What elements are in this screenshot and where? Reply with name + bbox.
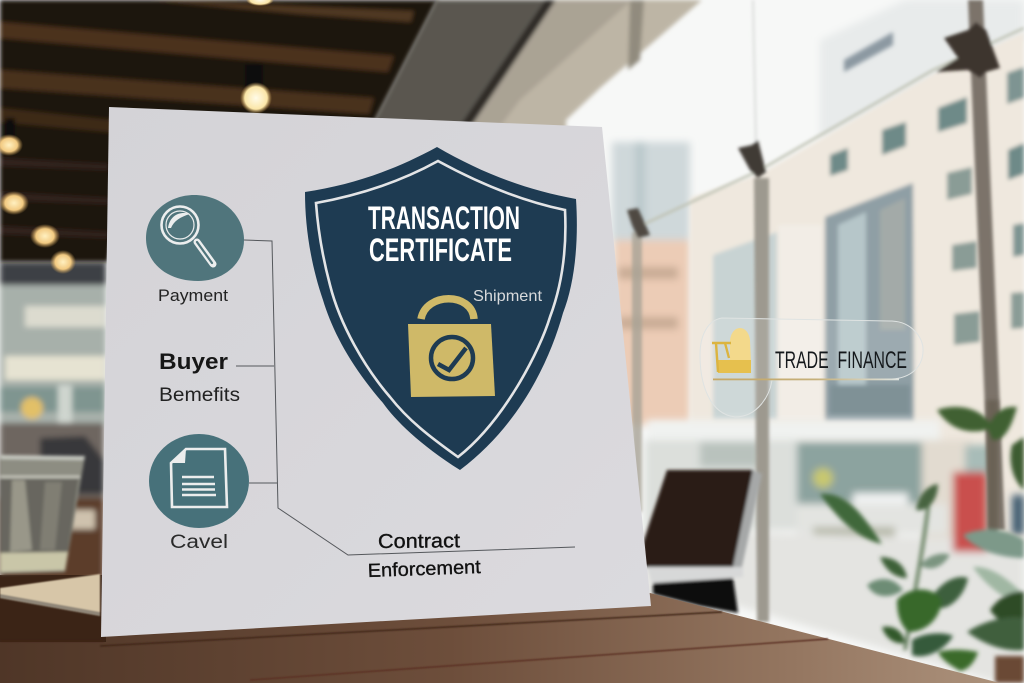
- table: [0, 593, 1000, 683]
- buyer benefits heading: Buyer: [159, 349, 228, 374]
- icon: document circle: [149, 434, 249, 528]
- laptop: [0, 574, 100, 616]
- panel: printed sign board: [101, 107, 651, 637]
- ground level street: [645, 420, 1024, 683]
- shield heading: [368, 200, 520, 268]
- hanging lamps: [0, 0, 274, 274]
- building facade: [690, 32, 1024, 545]
- shield heading: TRANSACTION: [368, 200, 520, 236]
- shipment label: Shipment: [473, 288, 543, 305]
- wooden ceiling: [0, 0, 438, 262]
- left interior windows: [0, 262, 106, 586]
- payment label: Payment: [158, 286, 228, 305]
- water glass: [0, 455, 85, 574]
- shield: [305, 147, 577, 470]
- potted plants: [820, 400, 1024, 683]
- connector lines: [236, 240, 575, 555]
- distant buildings: [612, 0, 1024, 425]
- icon: padlock with check: [408, 299, 495, 397]
- buyer benefits heading: [159, 349, 240, 406]
- contract enforcement label: Contract: [378, 530, 461, 553]
- callout: trade finance glass tag: [700, 318, 923, 417]
- icon: gold figure: [712, 328, 751, 373]
- trade finance label: TRADE FINANCE: [775, 347, 907, 374]
- shield heading: CERTIFICATE: [369, 232, 512, 268]
- icon: magnifier circle: [146, 195, 244, 281]
- concrete beam: [366, 0, 702, 142]
- office chair: [643, 470, 762, 613]
- window poles and brackets: [627, 0, 1024, 622]
- contract enforcement label: [367, 530, 482, 582]
- contract enforcement label: Enforcement: [367, 557, 482, 582]
- gavel label: Cavel: [170, 532, 228, 553]
- buyer benefits heading: Bemefits: [159, 385, 240, 406]
- gold rule: [713, 378, 899, 380]
